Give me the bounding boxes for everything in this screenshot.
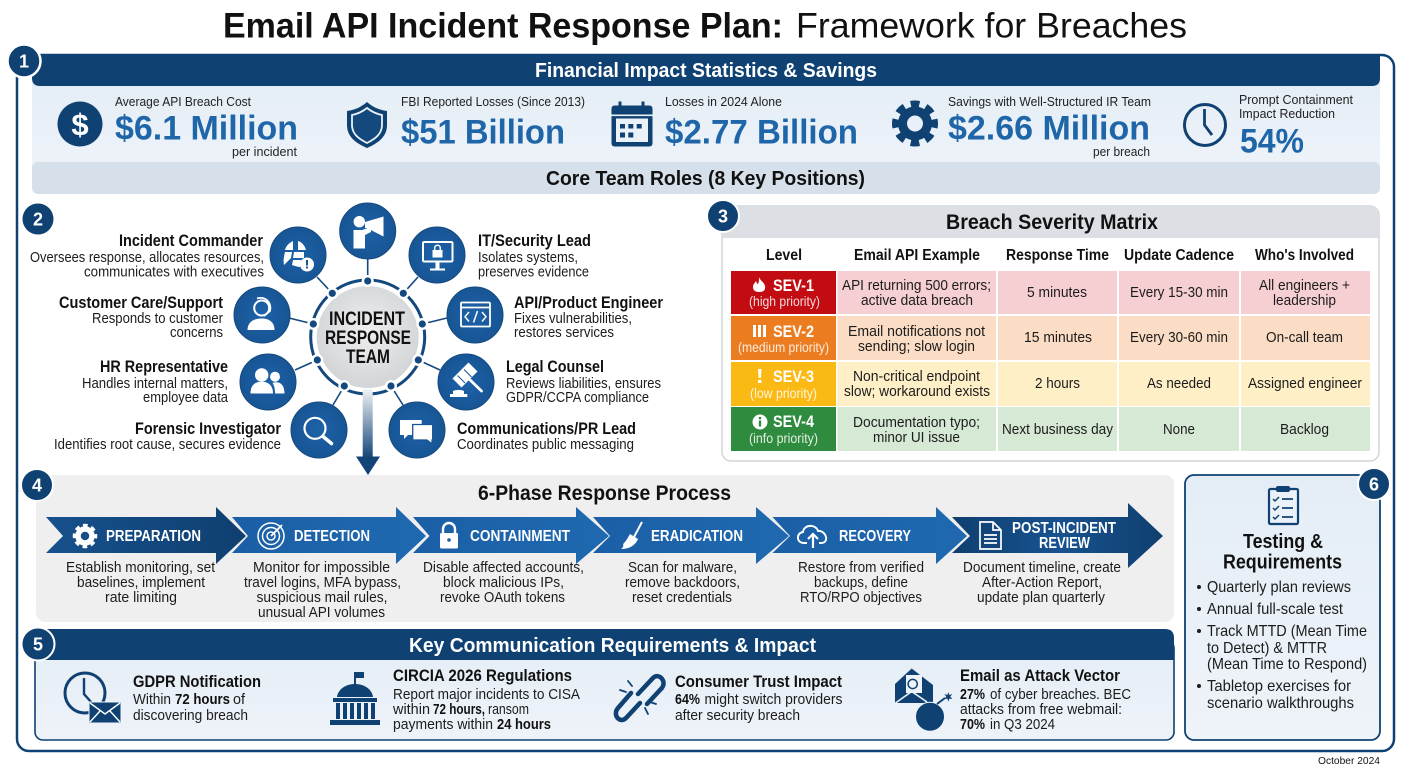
heading bar: core team roles: Core Team Roles (8 Key Positions) <box>546 168 865 190</box>
heading: breach severity matrix: Breach Severity Matrix <box>946 211 1158 234</box>
stat: savings with IR team: per breach <box>1093 144 1150 159</box>
role: IT security lead: preserves evidence <box>478 264 589 280</box>
phase: detection: travel logins, MFA bypass, <box>244 574 401 591</box>
phase: detection: Monitor for impossible <box>253 559 390 576</box>
role: communications PR lead: Communications/PR Lead <box>457 419 636 438</box>
role: forensic investigator: Identifies root cause, secures evidence <box>54 436 281 453</box>
stat: FBI reported losses: $51 Billion <box>401 114 565 152</box>
row: SEV-1: leadership <box>1273 292 1336 309</box>
phase: post-incident review: Document timeline, create <box>963 559 1121 576</box>
panel: 6-phase response process <box>36 475 1174 622</box>
badge 3: 3 <box>718 206 728 226</box>
heading: breach severity matrix <box>722 206 1379 238</box>
role: customer care: concerns <box>170 324 223 341</box>
icon: magnifier <box>291 402 347 458</box>
item: email as attack vector <box>895 666 1131 733</box>
stat: prompt containment: 54% <box>1240 122 1304 160</box>
title: Framework for Breaches <box>796 6 1187 46</box>
row: SEV-4: Next business day <box>1002 421 1113 438</box>
heading: key communication requirements <box>35 629 1174 660</box>
role: incident commander: communicates with executives <box>84 264 264 280</box>
date footnote: October 2024 <box>1318 755 1380 767</box>
badge 4: 4 <box>32 476 42 496</box>
panel: financial impact statistics <box>32 55 1380 170</box>
role: communications PR lead: Coordinates public messaging <box>457 436 634 453</box>
icon: headset agent <box>234 287 290 343</box>
row: SEV-2 <box>731 316 1370 360</box>
role: legal counsel: Reviews liabilities, ensures <box>506 375 661 392</box>
icon: clock and envelope <box>65 673 121 723</box>
item: CIRCIA regulations: within <box>392 701 430 718</box>
item: GDPR notification: Within <box>133 691 171 708</box>
icon: gavel <box>438 354 494 410</box>
item: GDPR notification: discovering breach <box>133 707 248 724</box>
heading: testing and requirements <box>1223 530 1342 574</box>
row: SEV-1: SEV-1 <box>773 276 814 295</box>
icon: monitor lock <box>409 227 465 283</box>
heading: testing and requirements: Testing & <box>1243 530 1323 553</box>
item: GDPR notification: 72 hours <box>175 691 230 708</box>
phase: preparation: Establish monitoring, set <box>66 559 216 576</box>
icon: exclamation <box>758 369 762 383</box>
stat: average breach cost: $6.1 Million <box>115 110 298 148</box>
phase: recovery: RTO/RPO objectives <box>800 589 922 606</box>
row: SEV-1: API returning 500 errors; <box>842 277 991 294</box>
row: SEV-4: (info priority) <box>749 430 818 446</box>
hub: incident response team: RESPONSE <box>325 328 411 349</box>
bullet list: Quarterly plan reviews <box>1207 579 1351 596</box>
icon: flame <box>753 277 765 292</box>
item: consumer trust impact <box>616 672 842 724</box>
phase: detection: suspicious mail rules, <box>256 589 388 606</box>
row: SEV-4: Backlog <box>1280 421 1329 438</box>
stat: prompt containment <box>1184 92 1353 160</box>
phase: eradication: ERADICATION <box>651 528 743 545</box>
phase: recovery: RECOVERY <box>839 528 912 545</box>
phase: post-incident review: REVIEW <box>1039 535 1090 552</box>
row: SEV-4: minor UI issue <box>873 429 960 446</box>
item: email as attack vector: Email as Attack Vector <box>960 666 1120 685</box>
phase: post-incident review: After-Action Report, <box>982 574 1102 591</box>
role: incident commander: Incident Commander <box>119 231 263 250</box>
row: SEV-4 <box>731 407 1370 451</box>
row: SEV-2: Every 30-60 min <box>1130 329 1228 346</box>
row: SEV-2: (medium priority) <box>738 339 829 355</box>
stat: FBI reported losses <box>347 94 585 152</box>
role: IT security lead: IT/Security Lead <box>478 231 591 250</box>
heading: 6-phase response process: 6-Phase Response Process <box>478 482 731 505</box>
stat: average breach cost: Average API Breach Cost <box>115 94 251 109</box>
role: HR representative: HR Representative <box>100 357 228 376</box>
heading: key communication requirements: Key Communication Requirements & Impact <box>409 635 816 657</box>
icon: globe alert <box>270 227 326 283</box>
item: consumer trust impact: Consumer Trust Impact <box>675 672 842 691</box>
row: SEV-2: Email notifications not <box>848 323 986 340</box>
stat: prompt containment: Prompt Containment <box>1239 92 1353 107</box>
heading: financial impact <box>32 55 1380 86</box>
stat: savings with IR team <box>896 94 1151 159</box>
phase: post-incident review: POST-INCIDENT <box>1012 520 1116 537</box>
role: API product engineer: Fixes vulnerabilities, <box>514 310 632 327</box>
phase: eradication: reset credentials <box>632 589 732 606</box>
role: customer care: Responds to customer <box>92 310 223 327</box>
badge 6: 6 <box>1369 474 1379 494</box>
badge 4 <box>21 469 53 501</box>
stat: losses in 2024: $2.77 Billion <box>665 114 858 152</box>
diagram: incident response team <box>30 203 663 475</box>
stat: losses in 2024 <box>612 94 858 152</box>
phase: eradication <box>593 507 789 606</box>
phase: containment: revoke OAuth tokens <box>440 589 565 606</box>
role: IT security lead: Isolates systems, <box>478 249 578 266</box>
row: SEV-3: slow; workaround exists <box>844 383 990 400</box>
item: CIRCIA regulations <box>330 666 580 733</box>
phase: containment: block malicious IPs, <box>443 574 564 591</box>
stat: FBI reported losses: FBI Reported Losses (Since 2013) <box>401 94 585 109</box>
phase: post-incident review: update plan quarterly <box>977 589 1105 606</box>
item: GDPR notification: of <box>233 691 246 708</box>
icon: info <box>752 414 768 430</box>
item: GDPR notification: GDPR Notification <box>133 672 261 691</box>
heading: testing and requirements: Requirements <box>1223 550 1342 574</box>
row: SEV-2: On-call team <box>1266 329 1343 346</box>
icon: broom <box>621 522 642 549</box>
table header row: Update Cadence <box>1124 247 1234 264</box>
phase: detection: unusual API volumes <box>258 604 385 621</box>
row: SEV-2: SEV-2 <box>773 322 814 341</box>
icon: email and bomb <box>895 668 952 731</box>
title <box>223 6 1187 46</box>
icon: capitol building <box>330 672 380 725</box>
row: SEV-4: Documentation typo; <box>853 414 980 431</box>
bullet list: scenario walkthroughs <box>1207 695 1354 712</box>
icon: people <box>240 354 296 410</box>
stat: average breach cost: per incident <box>232 144 297 159</box>
panel: key communication requirements <box>35 629 1174 740</box>
stat: losses in 2024: Losses in 2024 Alone <box>665 94 782 109</box>
phase: containment: Disable affected accounts, <box>423 559 584 576</box>
role: API product engineer: restores services <box>514 324 614 341</box>
role: HR representative: employee data <box>143 389 229 406</box>
item: GDPR notification <box>65 672 261 724</box>
row: SEV-4: SEV-4 <box>773 412 814 431</box>
row: SEV-1: 5 minutes <box>1027 284 1087 301</box>
badge 5: 5 <box>33 634 43 654</box>
badge 3 <box>707 200 739 232</box>
icon: cloud upload <box>798 526 826 548</box>
hub: incident response team: INCIDENT <box>329 309 405 330</box>
badge 1: 1 <box>19 52 29 72</box>
row: SEV-3: (low priority) <box>750 385 817 401</box>
item: CIRCIA regulations: Report major incidents to CISA <box>393 686 580 703</box>
role: HR representative <box>82 357 229 406</box>
bullet list: Annual full-scale test <box>1207 601 1344 618</box>
icon: radar <box>258 523 284 549</box>
icon: document <box>980 522 1001 549</box>
item: CIRCIA regulations: CIRCIA 2026 Regulations <box>393 666 572 685</box>
row: SEV-3: 2 hours <box>1035 375 1080 392</box>
row: SEV-1 <box>731 271 1370 314</box>
row: SEV-1: active data breach <box>861 292 973 309</box>
badge 1 <box>8 44 40 78</box>
phase: detection: DETECTION <box>294 528 370 545</box>
heading: financial impact: Financial Impact Statistics & Savings <box>535 60 877 82</box>
table header row: Who's Involved <box>1255 247 1354 264</box>
role: IT security lead <box>478 231 591 280</box>
panel: breach severity matrix <box>722 206 1379 461</box>
item: CIRCIA regulations: 72 hours, <box>433 701 485 718</box>
role: forensic investigator <box>54 419 281 453</box>
item: consumer trust impact: after security breach <box>675 707 800 724</box>
phase: recovery <box>772 507 967 606</box>
phase: containment: CONTAINMENT <box>470 528 570 545</box>
icon: bars <box>753 325 766 337</box>
stat: average breach cost <box>58 94 298 159</box>
phase: preparation: baselines, implement <box>77 574 206 591</box>
row: SEV-1: (high priority) <box>749 293 820 309</box>
table header row <box>766 247 1354 264</box>
badge 2 <box>22 204 54 234</box>
role: forensic investigator: Forensic Investigator <box>135 419 281 438</box>
item: email as attack vector: of cyber breaches. BEC <box>990 686 1131 703</box>
phase: detection <box>232 507 426 621</box>
icon: code window <box>447 287 503 343</box>
row: SEV-2: 15 minutes <box>1024 329 1092 346</box>
table header row: Response Time <box>1006 247 1109 264</box>
role: legal counsel: GDPR/CCPA compliance <box>506 389 649 406</box>
stat: savings with IR team: $2.66 Million <box>948 110 1150 148</box>
phase: recovery: Restore from verified <box>798 559 924 576</box>
bullet list: to Detect) & MTTR <box>1207 640 1327 657</box>
hub: incident response team <box>307 275 428 394</box>
badge 6 <box>1358 468 1390 500</box>
stat: prompt containment: Impact Reduction <box>1239 106 1335 121</box>
phase: preparation <box>46 507 246 606</box>
stat: savings with IR team: Savings with Well-Structured IR Team <box>948 94 1151 109</box>
phase: post-incident review <box>952 503 1163 606</box>
item: CIRCIA regulations: ransom <box>488 701 529 718</box>
row: SEV-1: Every 15-30 min <box>1130 284 1228 301</box>
item: email as attack vector: 27% <box>960 686 985 703</box>
icon: gear <box>74 526 96 546</box>
bullet list: (Mean Time to Respond) <box>1207 656 1367 673</box>
item: consumer trust impact: 64% <box>675 691 700 708</box>
icon: megaphone <box>340 203 396 259</box>
badge 5 <box>22 628 54 660</box>
item: email as attack vector: in Q3 2024 <box>990 716 1055 733</box>
role: customer care <box>59 293 223 341</box>
icon: speech bubbles <box>389 402 445 458</box>
stat: average breach cost: $ <box>71 107 89 142</box>
role: communications PR lead <box>457 419 636 453</box>
icon: broken chain <box>616 676 664 720</box>
role: incident commander <box>30 231 264 280</box>
table header row: Email API Example <box>854 247 980 264</box>
phase: eradication: remove backdoors, <box>625 574 740 591</box>
item: CIRCIA regulations: 24 hours <box>497 716 551 733</box>
phase: containment <box>413 507 609 606</box>
heading bar: core team roles <box>32 162 1380 194</box>
role: HR representative: Handles internal matters, <box>82 375 228 392</box>
title: Email API Incident Response Plan: <box>223 6 783 46</box>
row: SEV-4: None <box>1163 421 1195 438</box>
phase: preparation: rate limiting <box>105 589 177 606</box>
hub: incident response team: TEAM <box>346 347 390 368</box>
phase: preparation: PREPARATION <box>106 528 201 545</box>
icon: clipboard checklist <box>1269 486 1298 524</box>
role: legal counsel: Legal Counsel <box>506 357 604 376</box>
arrow from hub to process <box>356 389 380 475</box>
row: SEV-3 <box>731 362 1370 406</box>
item: consumer trust impact: might switch providers <box>704 691 842 708</box>
icon: padlock <box>440 523 458 548</box>
item: email as attack vector: attacks from free webmail: <box>960 701 1122 718</box>
role: API product engineer <box>514 293 663 341</box>
phase: eradication: Scan for malware, <box>628 559 737 576</box>
role: customer care: Customer Care/Support <box>59 293 223 312</box>
panel: testing and requirements <box>1185 475 1380 740</box>
row: SEV-1: All engineers + <box>1259 277 1350 294</box>
role: incident commander: Oversees response, allocates resources, <box>30 249 264 266</box>
item: email as attack vector: 70% <box>960 716 985 733</box>
row: SEV-2: sending; slow login <box>858 338 975 355</box>
row: SEV-3: As needed <box>1147 375 1211 392</box>
badge 2: 2 <box>33 210 43 230</box>
role: legal counsel <box>506 357 661 406</box>
phase: recovery: backups, define <box>814 574 908 591</box>
role: API product engineer: API/Product Engineer <box>514 293 663 312</box>
item: CIRCIA regulations: payments within <box>393 716 493 733</box>
bullet list <box>1197 579 1367 712</box>
bullet list: Tabletop exercises for <box>1207 678 1352 695</box>
row: SEV-3: Non-critical endpoint <box>853 368 981 385</box>
row: SEV-3: Assigned engineer <box>1248 375 1362 392</box>
row: SEV-3: SEV-3 <box>773 367 814 386</box>
table header row: Level <box>766 247 802 264</box>
bullet list: Track MTTD (Mean Time <box>1207 623 1367 640</box>
